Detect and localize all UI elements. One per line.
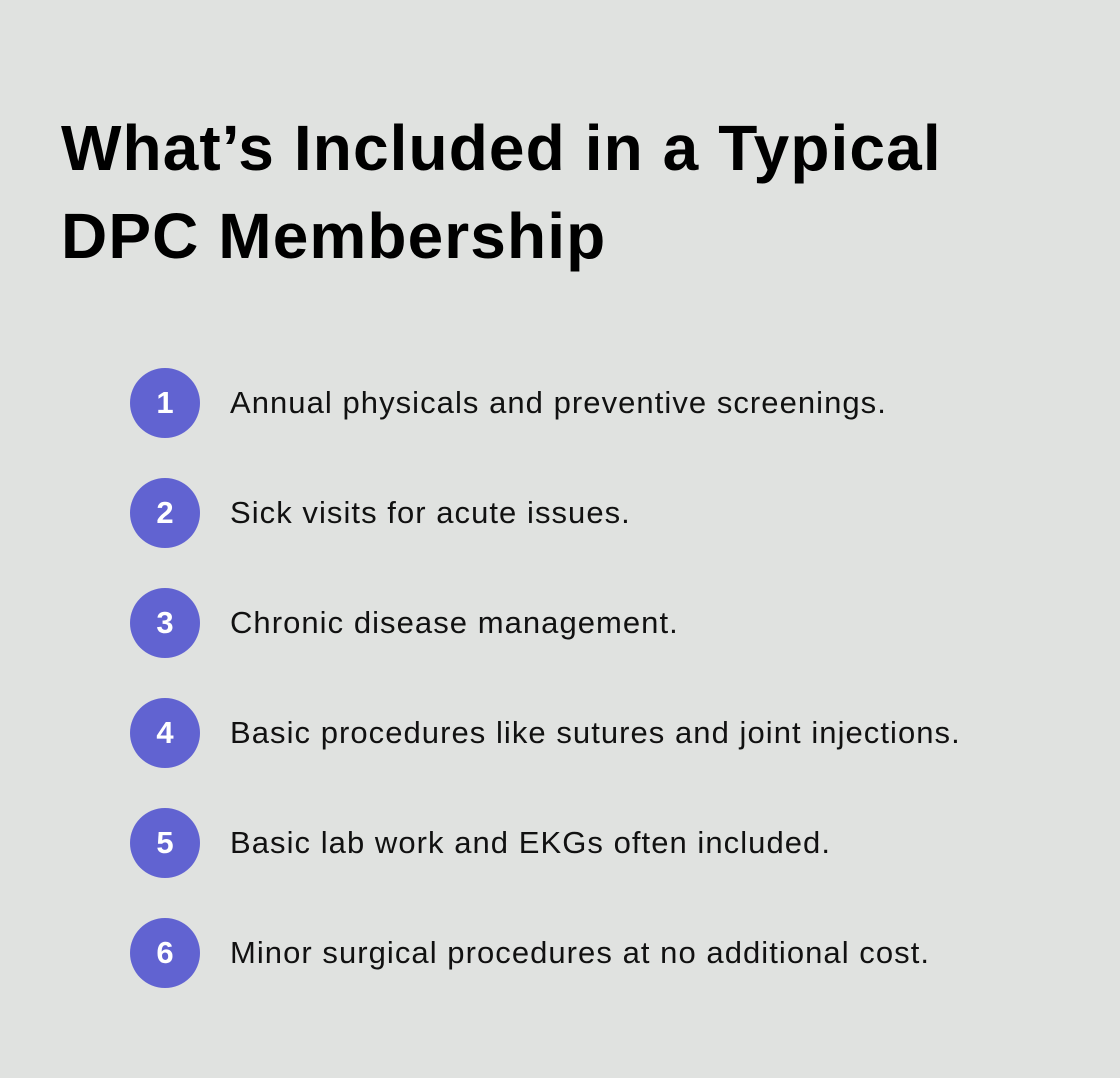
- item 2: [130, 478, 631, 548]
- item 3: Chronic disease management.: [230, 605, 679, 640]
- title: DPC Membership: [61, 200, 606, 272]
- item 6: [130, 918, 930, 988]
- item 1: [130, 368, 887, 438]
- title: [61, 112, 942, 272]
- item 4: Basic procedures like sutures and joint injections.: [230, 715, 961, 750]
- item 4: [130, 698, 961, 768]
- item 6: Minor surgical procedures at no additional cost.: [230, 935, 930, 970]
- item 5: [130, 808, 831, 878]
- item 1: Annual physicals and preventive screenings.: [230, 385, 887, 420]
- item 3: 3: [156, 605, 174, 640]
- item 2: Sick visits for acute issues.: [230, 495, 631, 530]
- item 5: Basic lab work and EKGs often included.: [230, 825, 831, 860]
- item 2: 2: [156, 495, 174, 530]
- item 5: 5: [156, 825, 174, 860]
- item 1: 1: [156, 385, 174, 420]
- item 3: [130, 588, 679, 658]
- item 6: 6: [156, 935, 174, 970]
- title: What’s Included in a Typical: [61, 112, 942, 184]
- item 4: 4: [156, 715, 174, 750]
